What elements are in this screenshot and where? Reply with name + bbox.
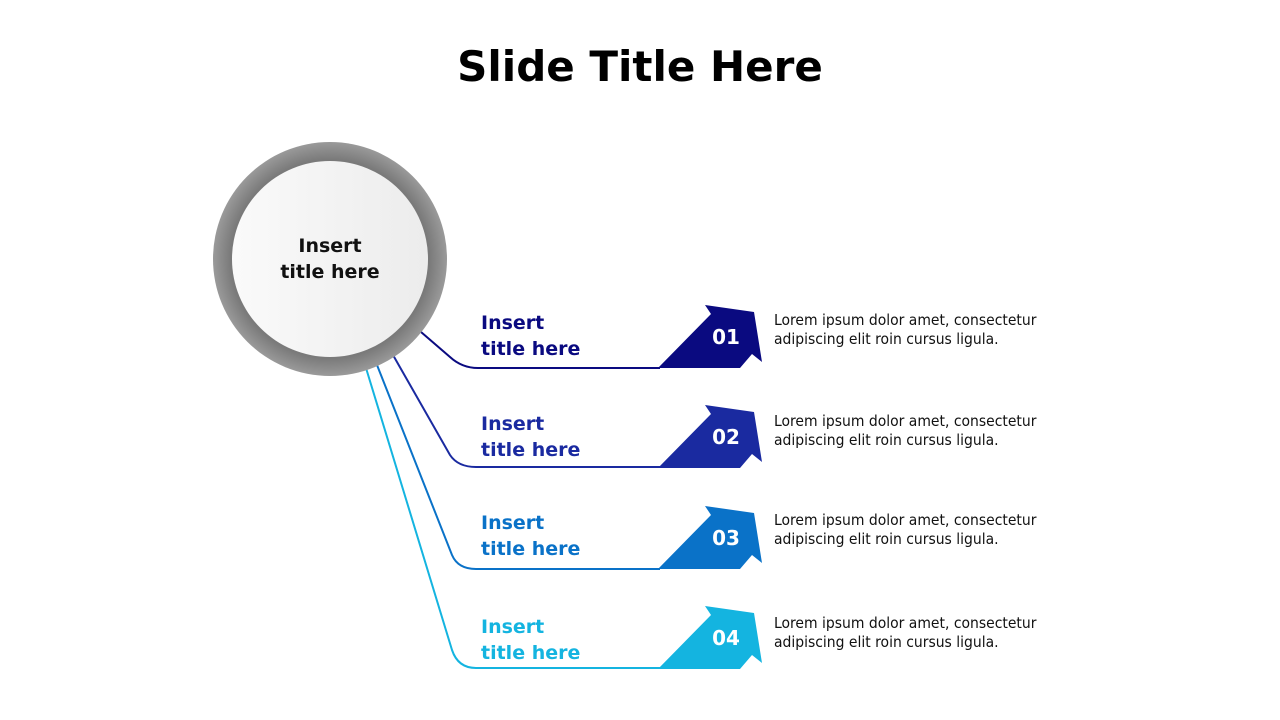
arrow 01: 01 xyxy=(712,325,740,349)
item 1 title xyxy=(481,312,580,360)
arrow 04: 04 xyxy=(712,626,740,650)
center title: Insert xyxy=(298,235,362,257)
center circle xyxy=(213,142,447,376)
item 4 text: Lorem ipsum dolor amet, consectetur xyxy=(774,614,1036,632)
item 4 title: Insert xyxy=(481,616,544,638)
item 2 text: adipiscing elit roin cursus ligula. xyxy=(774,431,999,449)
item 1 title: Insert xyxy=(481,312,544,334)
item 3 text: adipiscing elit roin cursus ligula. xyxy=(774,530,999,548)
item 3 text xyxy=(774,511,1036,548)
item 1 text xyxy=(774,311,1036,348)
arrow 04 xyxy=(658,606,762,669)
center title xyxy=(280,235,380,283)
arrow 02 xyxy=(658,405,762,468)
item 2 title xyxy=(481,413,580,461)
item 4 title xyxy=(481,616,580,664)
item 1 text: adipiscing elit roin cursus ligula. xyxy=(774,330,999,348)
item 3 text: Lorem ipsum dolor amet, consectetur xyxy=(774,511,1036,529)
item 1 text: Lorem ipsum dolor amet, consectetur xyxy=(774,311,1036,329)
title: Slide Title Here xyxy=(457,42,823,91)
item 2 text xyxy=(774,412,1036,449)
item 2 text: Lorem ipsum dolor amet, consectetur xyxy=(774,412,1036,430)
item 4 text: adipiscing elit roin cursus ligula. xyxy=(774,633,999,651)
center title: title here xyxy=(280,261,380,283)
item 3 title: title here xyxy=(481,538,580,560)
item 2 title: title here xyxy=(481,439,580,461)
item 3 title: Insert xyxy=(481,512,544,534)
arrow 01 xyxy=(658,305,762,368)
item 4 text xyxy=(774,614,1036,651)
arrow 03: 03 xyxy=(712,526,740,550)
arrow 03 xyxy=(658,506,762,569)
item 4 title: title here xyxy=(481,642,580,664)
item 3 title xyxy=(481,512,580,560)
connector lines xyxy=(366,332,660,668)
arrow 02: 02 xyxy=(712,425,740,449)
item 2 title: Insert xyxy=(481,413,544,435)
item 1 title: title here xyxy=(481,338,580,360)
